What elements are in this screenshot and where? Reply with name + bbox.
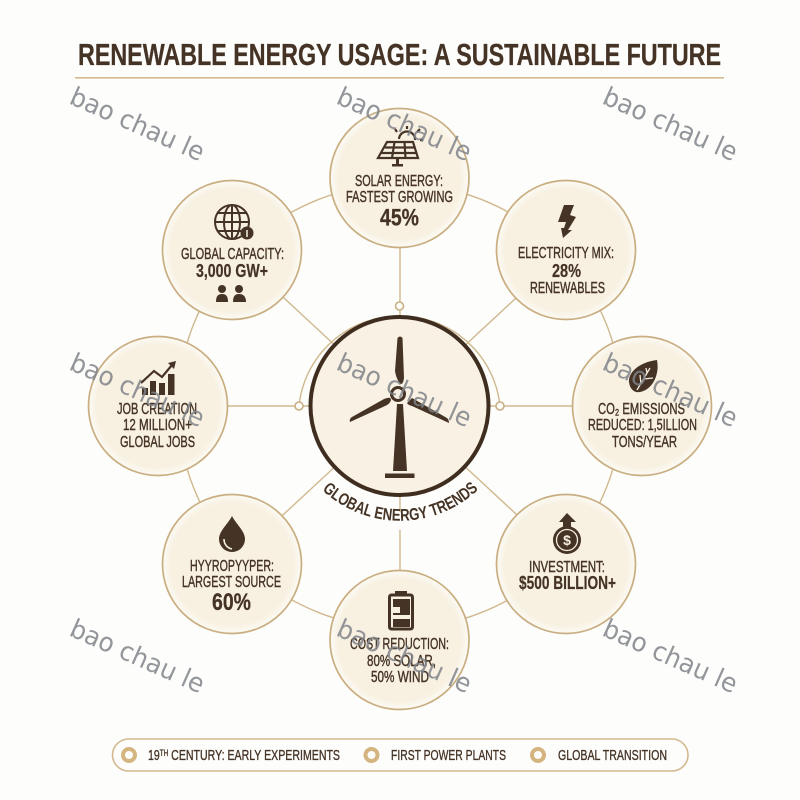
- panel: cost reduction: [330, 570, 469, 710]
- icon: battery: [390, 591, 412, 629]
- central hub: wind turbine: [310, 317, 488, 495]
- panel: solar energy: SOLAR ENERGY:: [355, 173, 443, 190]
- panel: job creation: 12 MILLION+: [123, 417, 192, 434]
- legend item: 19th century: [123, 747, 340, 764]
- panel: co2 emissions: CO₂ EMISSIONS: [598, 401, 685, 418]
- watermarks: bao chau le: [65, 82, 209, 168]
- icon: lightning bolt: [558, 205, 576, 238]
- panel: job creation: [88, 336, 228, 476]
- watermarks: bao chau le: [65, 614, 209, 700]
- panel: co2 emissions: REDUCED: 1,5ILLION: [588, 417, 697, 434]
- panel: cost reduction: COST REDUCTION:: [350, 636, 449, 653]
- legend item: first power plants: FIRST POWER PLANTS: [391, 747, 506, 764]
- legend item: global transition: GLOBAL TRANSITION: [558, 747, 667, 764]
- icon: water drop: [219, 516, 245, 552]
- icon: wind turbine: [350, 336, 449, 478]
- watermarks: bao chau le: [332, 348, 476, 434]
- panel: investment: INVESTMENT:: [529, 559, 605, 576]
- panel: electricity mix: ELECTRICITY MIX:: [518, 245, 614, 262]
- watermarks: bao chau le: [332, 614, 476, 700]
- panel: job creation: JOB CREATION: [117, 401, 197, 418]
- watermarks: bao chau le: [598, 82, 742, 168]
- panel: hydropower: [162, 494, 302, 634]
- icon: money with up arrow: $: [563, 532, 571, 548]
- icon: growth chart: [141, 361, 176, 395]
- legend item: 19th century: 19: [148, 747, 165, 764]
- watermarks: bao chau le: [65, 348, 209, 434]
- panel: cost reduction: 50% WIND: [371, 669, 429, 686]
- panel: global capacity: [162, 180, 302, 320]
- legend item: 19th century: TH: [160, 748, 168, 758]
- panel: electricity mix: [496, 180, 636, 320]
- panel: co2 emissions: [572, 336, 712, 476]
- panel: solar energy: 45%: [380, 204, 419, 232]
- watermarks: bao chau le: [598, 348, 742, 434]
- panel: global capacity: GLOBAL CAPACITY:: [181, 246, 284, 263]
- panel: job creation: GLOBAL JOBS: [120, 434, 195, 451]
- panel: electricity mix: RENEWABLES: [530, 280, 605, 297]
- curved label: global energy trends: GLOBAL ENERGY TRENDS: [324, 482, 477, 521]
- panel: hydropower: HYYROPYYPER:: [190, 558, 274, 575]
- panel: investment: [496, 494, 636, 634]
- legend item: global transition: [532, 747, 667, 764]
- panel: investment: $500 BILLION+: [519, 572, 616, 593]
- watermarks: bao chau le: [598, 614, 742, 700]
- watermarks: bao chau le: [332, 82, 476, 168]
- icon: people: [216, 285, 246, 302]
- watermarks: [65, 82, 742, 700]
- panel: solar energy: [330, 108, 469, 248]
- panel: global capacity: 3,000 GW+: [196, 260, 268, 281]
- icon: globe: [215, 205, 254, 240]
- panel: electricity mix: 28%: [552, 260, 581, 281]
- panel: hydropower: 60%: [212, 589, 251, 616]
- panel: solar energy: FASTEST GROWING: [346, 189, 453, 206]
- panel: cost reduction: 80% SOLAR,: [367, 653, 436, 670]
- legend item: first power plants: [366, 747, 506, 764]
- icon: leaf: [629, 360, 658, 392]
- panel: hydropower: LARGEST SOURCE: [182, 574, 281, 591]
- panel: co2 emissions: TONS/YEAR: [612, 434, 677, 451]
- connector network: [178, 184, 622, 628]
- icon: solar panel: [378, 126, 423, 166]
- timeline legend: [112, 739, 688, 771]
- legend item: 19th century: CENTURY: EARLY EXPERIMENTS: [168, 747, 340, 764]
